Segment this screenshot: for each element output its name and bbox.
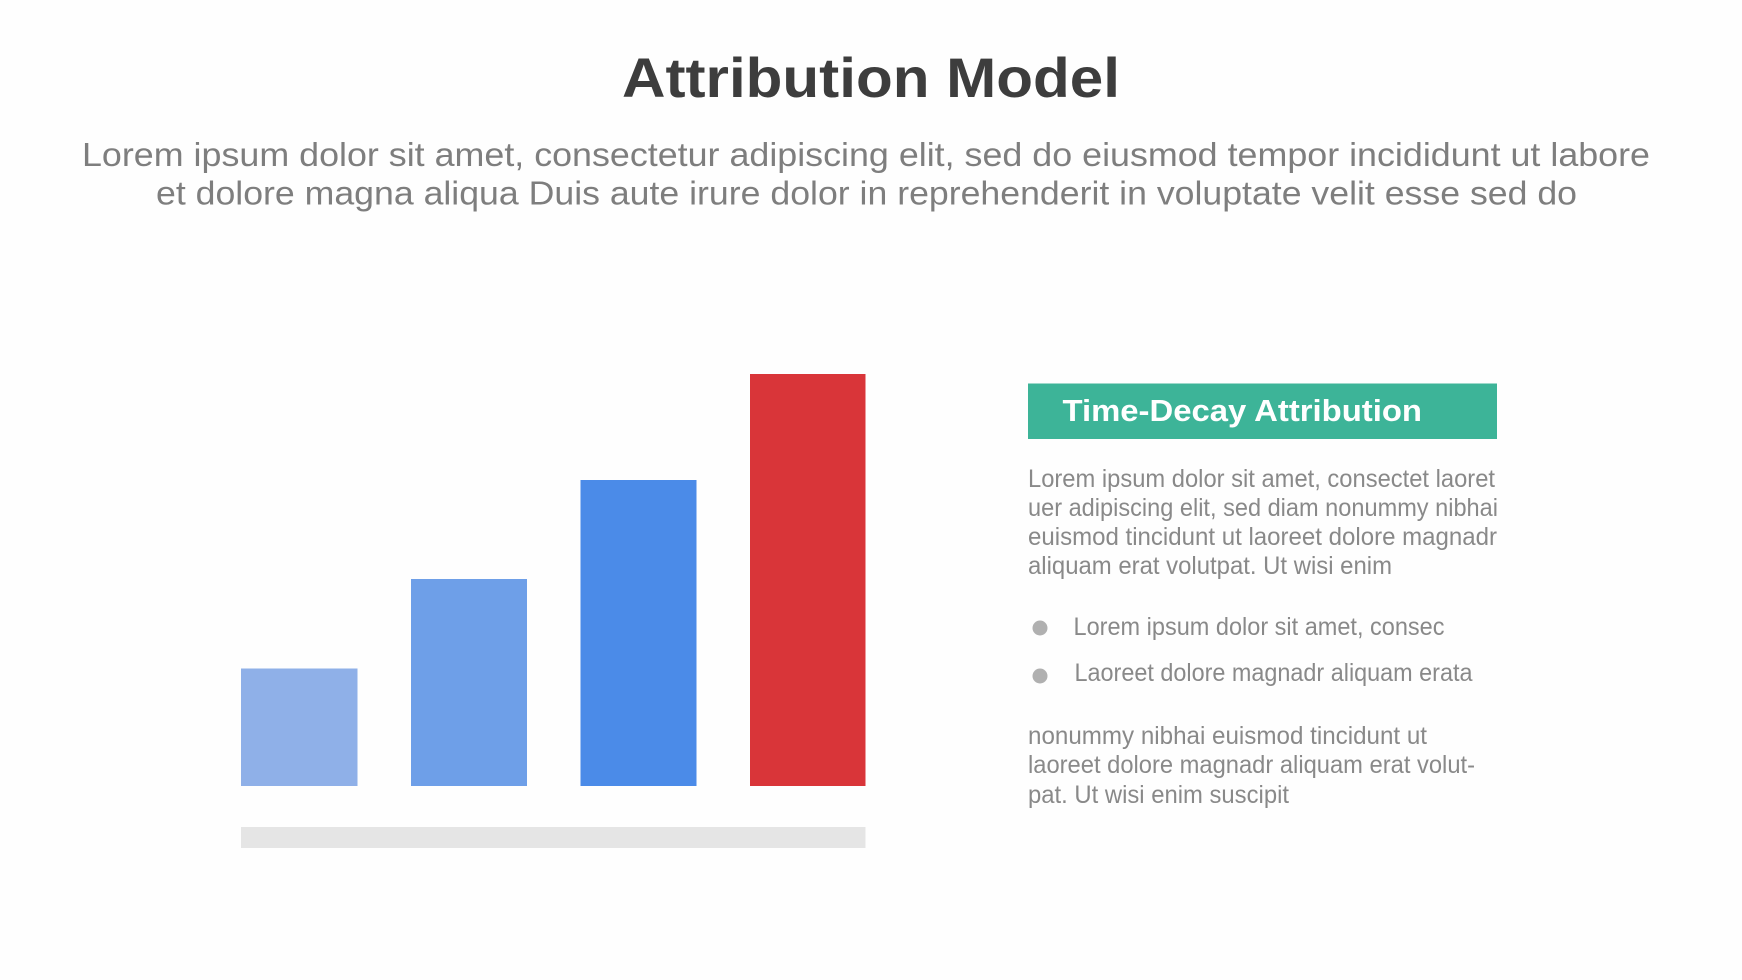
subtitle text block: Lorem ipsum dolor sit amet, consectetur adipiscing elit, sed do eiusmod tempor incididunt ut labore — [82, 137, 1650, 174]
header banner: Time-Decay Attribution — [1062, 393, 1422, 428]
closing paragraph: nonummy nibhai euismod tincidunt ut — [1028, 722, 1427, 750]
closing paragraph — [1028, 722, 1475, 809]
bar 2 — [411, 579, 527, 786]
panel: time-decay attribution — [1028, 384, 1498, 809]
bar chart — [241, 374, 866, 848]
bullet item 2: Laoreet dolore magnadr aliquam erata — [1074, 659, 1473, 687]
header banner — [1028, 384, 1497, 439]
bar 4 (highlighted) — [750, 374, 866, 786]
bar 3 — [580, 480, 696, 786]
body paragraph: uer adipiscing elit, sed diam nonummy nibhai — [1028, 494, 1498, 522]
body paragraph: euismod tincidunt ut laoreet dolore magnadr — [1028, 523, 1497, 551]
title: Attribution Model — [622, 46, 1120, 109]
bar 1 — [241, 668, 358, 786]
body paragraph — [1028, 465, 1498, 580]
bullet item 1: Lorem ipsum dolor sit amet, consec — [1074, 613, 1444, 641]
chart baseline bar — [241, 827, 866, 848]
body paragraph: aliquam erat volutpat. Ut wisi enim — [1028, 552, 1392, 580]
closing paragraph: laoreet dolore magnadr aliquam erat volut- — [1028, 751, 1475, 779]
subtitle text block: et dolore magna aliqua Duis aute irure dolor in reprehenderit in voluptate velit esse sed do — [156, 176, 1577, 212]
body paragraph: Lorem ipsum dolor sit amet, consectet laoret — [1028, 465, 1495, 493]
closing paragraph: pat. Ut wisi enim suscipit — [1028, 781, 1289, 809]
subtitle text block — [82, 137, 1650, 212]
